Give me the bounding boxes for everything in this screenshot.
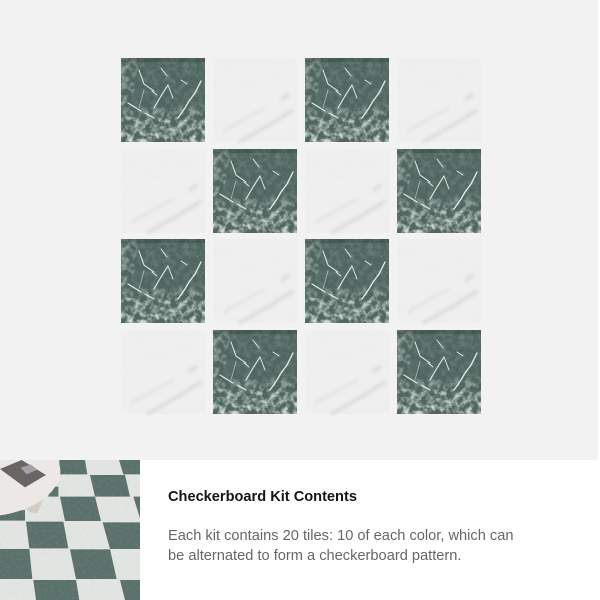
body text: be alternated to form a checkerboard pattern. [168,548,462,564]
tile: dark green marble [305,239,389,323]
tile: dark green marble [121,58,205,142]
photo: checkerboard floor with table [0,460,140,600]
tile: dark green marble [397,149,481,233]
tile: white marble [397,239,481,323]
tile: white marble [213,58,297,142]
tile: dark green marble [397,330,481,414]
background panel [0,0,598,460]
tile: white marble [121,330,205,414]
tile: dark green marble [121,239,205,323]
tile: white marble [121,149,205,233]
tile: white marble [305,330,389,414]
row 1 tiles [121,58,481,142]
tile: white marble [213,239,297,323]
heading: Checkerboard Kit Contents [168,489,357,505]
tile: white marble [305,149,389,233]
tile: dark green marble [213,330,297,414]
tile: white marble [397,58,481,142]
tile: dark green marble [305,58,389,142]
row 3 tiles [121,239,481,323]
body text: Each kit contains 20 tiles: 10 of each color, which can [168,528,514,544]
row 2 tiles [121,149,481,233]
tile grid [121,58,481,415]
row 4 tiles [121,330,481,414]
table [0,460,60,515]
tile: dark green marble [213,149,297,233]
body text [168,528,514,564]
